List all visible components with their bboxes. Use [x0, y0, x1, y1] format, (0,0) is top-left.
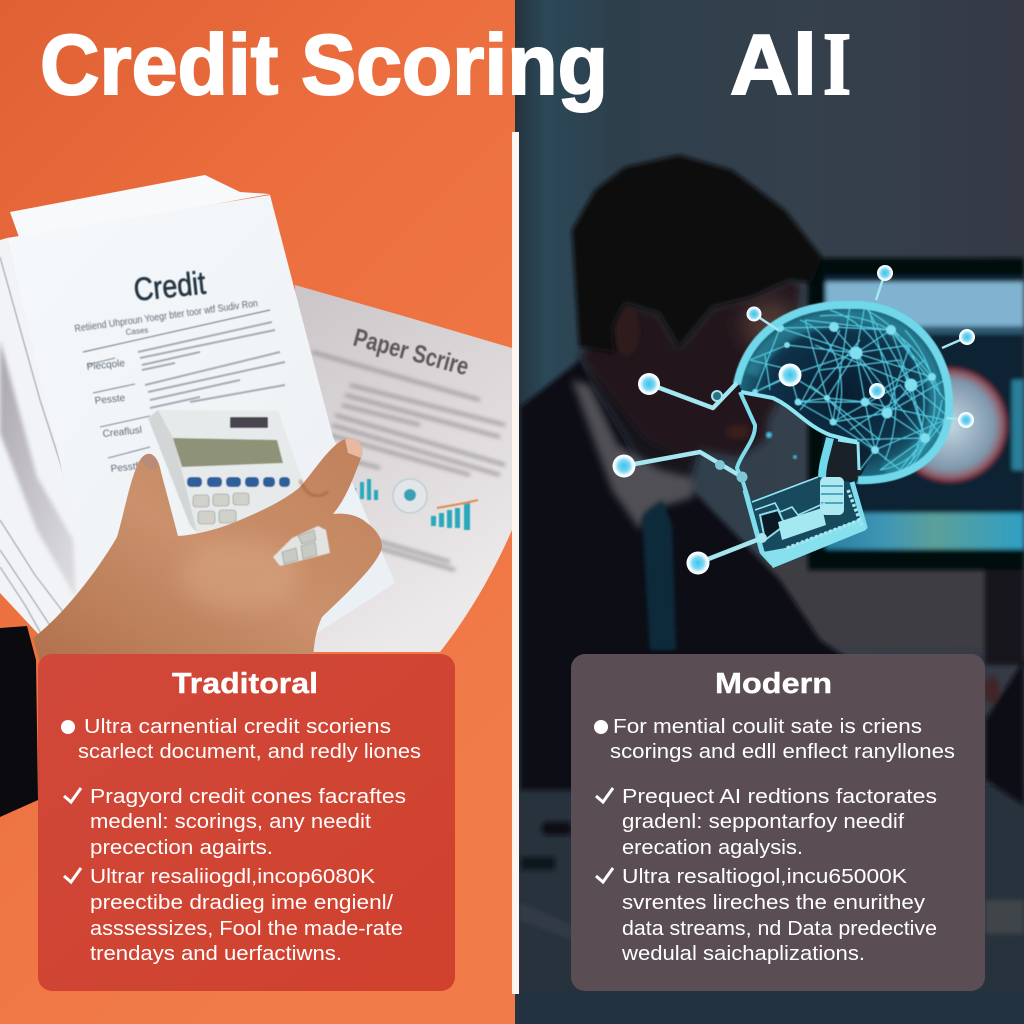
second item: Pragyord credit cones facraftes — [90, 785, 406, 808]
form sub heading: Retiiend Uhproun Yoegr bter toor wtf Sudiv Ron — [74, 298, 259, 335]
thumb nail — [345, 439, 362, 458]
row label: Pesstfl — [110, 461, 141, 475]
third item: trendays and uerfactiwns. — [90, 942, 342, 965]
check icon — [596, 788, 613, 802]
neck back line — [838, 440, 859, 470]
background: dark office scene — [515, 0, 1024, 1024]
brain underside outline — [741, 392, 857, 442]
title: Credit Scoring: Credit Scoring — [40, 18, 608, 113]
neck shadow — [580, 360, 700, 500]
second item: Prequect AI redtions factorates — [622, 785, 937, 808]
third item: preectibe dradieg ime engienl/ — [90, 891, 393, 914]
mesh nodes — [752, 322, 936, 454]
face profile outline — [737, 392, 755, 505]
third item: wedulal saichaplizations. — [621, 942, 865, 965]
glowing end nodes — [612, 265, 975, 574]
fan edges — [0, 257, 90, 637]
mini bar chart — [352, 479, 378, 500]
calculator keys between fingers — [273, 526, 330, 566]
bullet dot — [61, 720, 75, 734]
check icon — [596, 868, 613, 882]
jaw outline — [745, 482, 865, 563]
shirt collar — [572, 380, 694, 530]
first item — [78, 715, 421, 763]
form sub heading second line: Cases — [125, 326, 149, 337]
second item: medenl: scorings, any needit — [90, 810, 371, 833]
third item: Ultrar resaliiogdl,incop6080K — [90, 865, 375, 888]
finger nail — [140, 454, 158, 470]
translucent inner dome glow — [752, 318, 937, 470]
heading: Credit: Credit — [132, 265, 207, 308]
bottom jaw band — [763, 518, 866, 568]
head fill — [737, 302, 952, 484]
holographic AI brain head — [612, 265, 975, 574]
second item — [622, 785, 937, 859]
panel heading: Traditoral — [172, 668, 318, 700]
row label: Piecqole — [86, 358, 126, 373]
face — [579, 280, 800, 460]
row label: Creaflusl — [102, 425, 143, 440]
neck gap fill — [820, 440, 862, 480]
monitor behind the person — [808, 258, 1024, 665]
title: AI first letters: Al — [730, 18, 817, 113]
third item — [621, 865, 937, 965]
heading: Paper Score: Paper Scrire — [350, 324, 472, 381]
mini globe icon — [393, 479, 427, 513]
third item: data streams, nd Data predective — [622, 917, 937, 940]
jaw plate — [745, 477, 863, 562]
title — [40, 15, 851, 114]
fanned sheets base — [0, 238, 92, 638]
top sheet — [10, 175, 270, 240]
person silhouette — [520, 155, 900, 790]
dark sleeve — [0, 626, 38, 817]
panel: modern — [571, 654, 985, 991]
neural mesh — [750, 305, 950, 475]
check icon — [64, 788, 81, 802]
vertebra ribs — [820, 477, 844, 515]
second item: erecation agalysis. — [622, 836, 803, 859]
mini growth chart — [431, 500, 478, 530]
fan shadow wedge — [0, 340, 76, 598]
center divider — [512, 132, 519, 994]
panel: traditional — [38, 654, 455, 991]
bullet dot — [594, 720, 608, 734]
knuckle crease — [300, 480, 328, 496]
row label: Pesste — [94, 393, 126, 407]
background: orange half — [0, 0, 515, 1024]
stack of credit papers — [0, 175, 395, 638]
connector lines — [624, 273, 967, 563]
blurred body lines — [312, 352, 505, 570]
first item — [610, 715, 955, 763]
ear — [615, 304, 639, 356]
lips — [726, 426, 750, 438]
second item: precection agairts. — [90, 836, 273, 859]
paper with Paper Score heading — [295, 285, 512, 652]
panel heading: Modern — [715, 668, 832, 700]
palm highlight — [180, 540, 300, 610]
third item: Ultra resaltiogol,incu65000K — [622, 865, 907, 888]
second item: gradenl: seppontarfoy needif — [622, 810, 904, 833]
front sheet — [7, 195, 395, 633]
title: AI slab letter: I — [823, 15, 851, 114]
hand holding the calculator — [33, 439, 382, 662]
first item: For mential coulit sate is criens — [613, 715, 922, 738]
third item: svrentes lireches the enurithey — [622, 891, 926, 914]
suit — [520, 360, 900, 790]
first item: Ultra carnential credit scoriens — [84, 715, 391, 738]
forehead light — [742, 299, 798, 351]
desk objects — [519, 660, 1024, 940]
neck tube — [822, 438, 830, 478]
necktie — [642, 500, 676, 650]
capsule component — [778, 508, 826, 540]
third item — [90, 865, 403, 965]
first item: scarlect document, and redly liones — [78, 740, 421, 763]
first item: scorings and edll enflect ranyllones — [610, 740, 955, 763]
third item: asssessizes, Fool the made-rate — [90, 917, 403, 940]
second item — [90, 785, 406, 859]
form rows and lines — [83, 310, 285, 458]
check icon — [64, 868, 81, 882]
hair — [572, 155, 822, 353]
skull dome outline — [737, 305, 949, 480]
calculator — [148, 410, 330, 580]
